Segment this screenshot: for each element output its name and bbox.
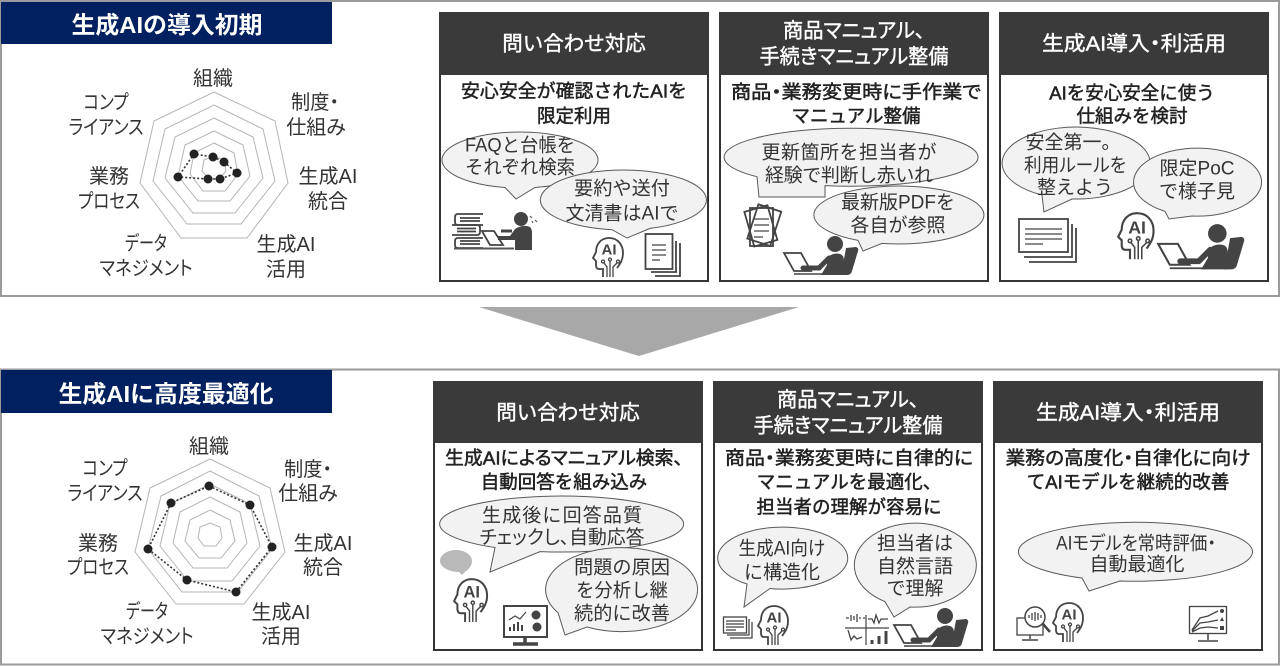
- card: 商品マニュアル (early): [719, 12, 989, 281]
- card: 生成AI導入 (optimized): てAIモデルを継続的改善: [1027, 472, 1229, 492]
- icon: document stack: [1019, 219, 1076, 262]
- card: 生成AI導入 (optimized): 業務の高度化・自律化に向け: [1006, 448, 1250, 468]
- radar labels: early stage: ライアンス: [68, 117, 144, 139]
- card: 商品マニュアル (optimized): [713, 381, 983, 650]
- radar labels: optimized stage: マネジメント: [100, 626, 194, 648]
- radar labels: optimized stage: データ: [126, 600, 168, 623]
- bubble: structured for AI: [718, 527, 848, 607]
- bubble: latest PDF: 各自が参照: [850, 214, 946, 236]
- panel frame: [1, 370, 1279, 664]
- bubble: auto answer: 生成後に回答品質: [482, 504, 642, 526]
- radar labels: optimized stage: 生成AI: [294, 532, 352, 555]
- card: 商品マニュアル (optimized): マニュアルを最適化、: [757, 472, 941, 492]
- icon: gray speech blob: [440, 550, 472, 575]
- radar labels: early stage: [68, 67, 357, 281]
- icon: document stack: [724, 617, 752, 638]
- bubble: latest PDF: [814, 186, 984, 251]
- bubble: FAQ search: [442, 132, 598, 199]
- card: 商品マニュアル (early): 商品・業務変更時に手作業で: [731, 82, 981, 102]
- bubble: safety first: [1002, 127, 1150, 212]
- bubble: natural language: 自然言語: [877, 556, 953, 578]
- icon: books and person at laptop: [452, 212, 537, 250]
- card: 問い合わせ対応 (optimized): 生成AIによるマニュアル検索、: [445, 448, 683, 468]
- radar labels: early stage: 統合: [308, 190, 348, 213]
- arrow: downward transition: [479, 307, 799, 356]
- bubble: root cause: 続的に改善: [574, 602, 670, 624]
- icon: person at laptop: [784, 236, 858, 275]
- card: 問い合わせ対応 (early): [439, 12, 709, 281]
- bubble: safety first: 利用ルールを: [1024, 154, 1126, 176]
- icon: person at laptop: [894, 608, 968, 647]
- bubble: safety first: 安全第一。: [1025, 132, 1121, 154]
- icon: AI head: AI: [1062, 606, 1076, 624]
- icon: AI head: [1053, 603, 1083, 642]
- bubble: FAQ search: それぞれ検索: [465, 156, 575, 178]
- card: 生成AI導入 (early): [999, 12, 1269, 281]
- card: 商品マニュアル (optimized): 商品マニュアル、: [777, 388, 919, 412]
- icon: AI head: [1118, 213, 1154, 259]
- radar labels: early stage: 生成AI: [299, 165, 357, 188]
- card: 生成AI導入 (optimized): 生成AI導入・利活用: [1036, 402, 1220, 424]
- radar labels: early stage: 組織: [193, 67, 233, 90]
- icon: documents: [646, 234, 680, 276]
- icon: AI head: AI: [766, 610, 782, 626]
- card: 問い合わせ対応 (early): 限定利用: [537, 106, 611, 126]
- bubble: latest PDF: 最新版PDFを: [841, 192, 955, 214]
- card: 生成AI導入 (early): 生成AI導入・利活用: [1042, 32, 1226, 56]
- bubble: limited PoC: [1134, 148, 1262, 219]
- radar labels: optimized stage: [67, 435, 352, 648]
- card: 問い合わせ対応 (optimized): 自動回答を組み込み: [481, 472, 647, 492]
- icon: signal charts: [845, 614, 889, 645]
- icon: person at laptop: [1158, 224, 1244, 269]
- bubble: continuous evaluation: [1018, 522, 1252, 591]
- card: 商品マニュアル (optimized): 手続きマニュアル整備: [754, 414, 942, 438]
- radar labels: optimized stage: コンプ: [82, 458, 128, 480]
- bubble: natural language: で理解: [886, 578, 944, 600]
- bubble: AI summary: [540, 170, 706, 238]
- card: 問い合わせ対応 (early): 問い合わせ対応: [502, 32, 646, 56]
- radar labels: optimized stage: 仕組み: [278, 482, 338, 505]
- bubble: root cause: [546, 548, 698, 635]
- radar labels: optimized stage: 活用: [261, 625, 301, 648]
- icon: AI head: AI: [1128, 217, 1146, 237]
- panel: 生成AIの導入初期: [1, 1, 1279, 296]
- radar labels: early stage: 制度・: [291, 91, 339, 114]
- radar labels: early stage: プロセス: [78, 191, 140, 213]
- icon: line chart monitor: [1190, 606, 1226, 641]
- bubble: limited PoC: で様子見: [1159, 180, 1235, 202]
- radar chart: optimized stage: [135, 459, 285, 604]
- title banner: 生成AIに高度最適化: [58, 381, 274, 407]
- card: 生成AI導入 (early): AIを安心安全に使う: [1049, 82, 1215, 104]
- bubble: root cause: 問題の原因: [574, 558, 670, 578]
- icon: fanned documents: [744, 204, 781, 247]
- bubble: auto answer: [440, 496, 684, 572]
- radar labels: optimized stage: 組織: [189, 435, 229, 458]
- card: 商品マニュアル (early): 商品マニュアル、: [783, 20, 925, 42]
- card: 生成AI導入 (optimized): [993, 381, 1263, 650]
- panel: 生成AIに高度最適化: [1, 370, 1279, 664]
- panel frame: [1, 1, 1279, 296]
- bubble: manual update: 更新箇所を担当者が: [762, 142, 936, 164]
- bubble: continuous evaluation: AIモデルを常時評価・: [1056, 532, 1216, 554]
- card: 商品マニュアル (optimized): 商品・業務変更時に自律的に: [725, 448, 973, 468]
- card: 商品マニュアル (optimized): 担当者の理解が容易に: [756, 496, 942, 518]
- radar labels: optimized stage: プロセス: [67, 557, 129, 579]
- bubble: structured for AI: に構造化: [744, 562, 820, 584]
- radar labels: early stage: コンプ: [84, 92, 129, 114]
- card: 生成AI導入 (early): 仕組みを検討: [1076, 106, 1188, 126]
- bubble: manual update: 経験で判断し赤いれ: [765, 164, 933, 186]
- icon: AI head: [454, 579, 487, 622]
- radar labels: early stage: 仕組み: [286, 116, 346, 139]
- radar labels: optimized stage: 制度・: [284, 458, 332, 481]
- title banner: [1, 2, 332, 44]
- icon: AI head: AI: [602, 242, 616, 258]
- radar labels: early stage: 活用: [266, 258, 306, 281]
- icon: magnifier monitor: [1017, 607, 1050, 640]
- card: 問い合わせ対応 (optimized): [433, 381, 703, 650]
- icon: AI head: [593, 238, 623, 277]
- radar labels: early stage: マネジメント: [100, 258, 192, 280]
- bubble: natural language: [854, 523, 976, 617]
- bubble: AI summary: 要約や送付: [574, 178, 670, 200]
- bubble: natural language: 担当者は: [877, 532, 953, 554]
- radar labels: early stage: 生成AI: [257, 233, 315, 256]
- icon: analytics monitor: [504, 606, 547, 644]
- bubble: auto answer: チェックし、自動応答: [480, 526, 644, 548]
- radar labels: optimized stage: 統合: [303, 556, 343, 579]
- bubble: FAQ search: FAQと台帳を: [465, 134, 575, 156]
- radar labels: optimized stage: 業務: [78, 532, 118, 555]
- radar labels: optimized stage: ライアンス: [68, 483, 142, 505]
- card: 問い合わせ対応 (early): 安心安全が確認されたAIを: [461, 80, 687, 102]
- radar labels: early stage: データ: [125, 232, 167, 255]
- title banner: [1, 370, 332, 413]
- bubble: structured for AI: 生成AI向け: [738, 538, 826, 560]
- bubble: manual update: [724, 128, 978, 197]
- card: 商品マニュアル (early): 手続きマニュアル整備: [760, 46, 948, 68]
- bubble: root cause: を分析し継: [576, 580, 668, 602]
- card: 商品マニュアル (early): マニュアル整備: [792, 106, 920, 126]
- bubble: continuous evaluation: 自動最適化: [1089, 554, 1185, 576]
- card: 問い合わせ対応 (optimized): 問い合わせ対応: [496, 402, 640, 424]
- radar labels: optimized stage: 生成AI: [252, 601, 310, 624]
- radar chart: early stage: [140, 92, 288, 238]
- bubble: limited PoC: 限定PoC: [1160, 158, 1234, 180]
- icon: AI head: [758, 606, 788, 645]
- title banner: 生成AIの導入初期: [72, 12, 262, 38]
- icon: AI head: AI: [463, 583, 480, 601]
- radar labels: early stage: 業務: [89, 165, 129, 188]
- bubble: safety first: 整えよう: [1037, 176, 1113, 198]
- bubble: AI summary: 文清書はAIで: [566, 202, 678, 224]
